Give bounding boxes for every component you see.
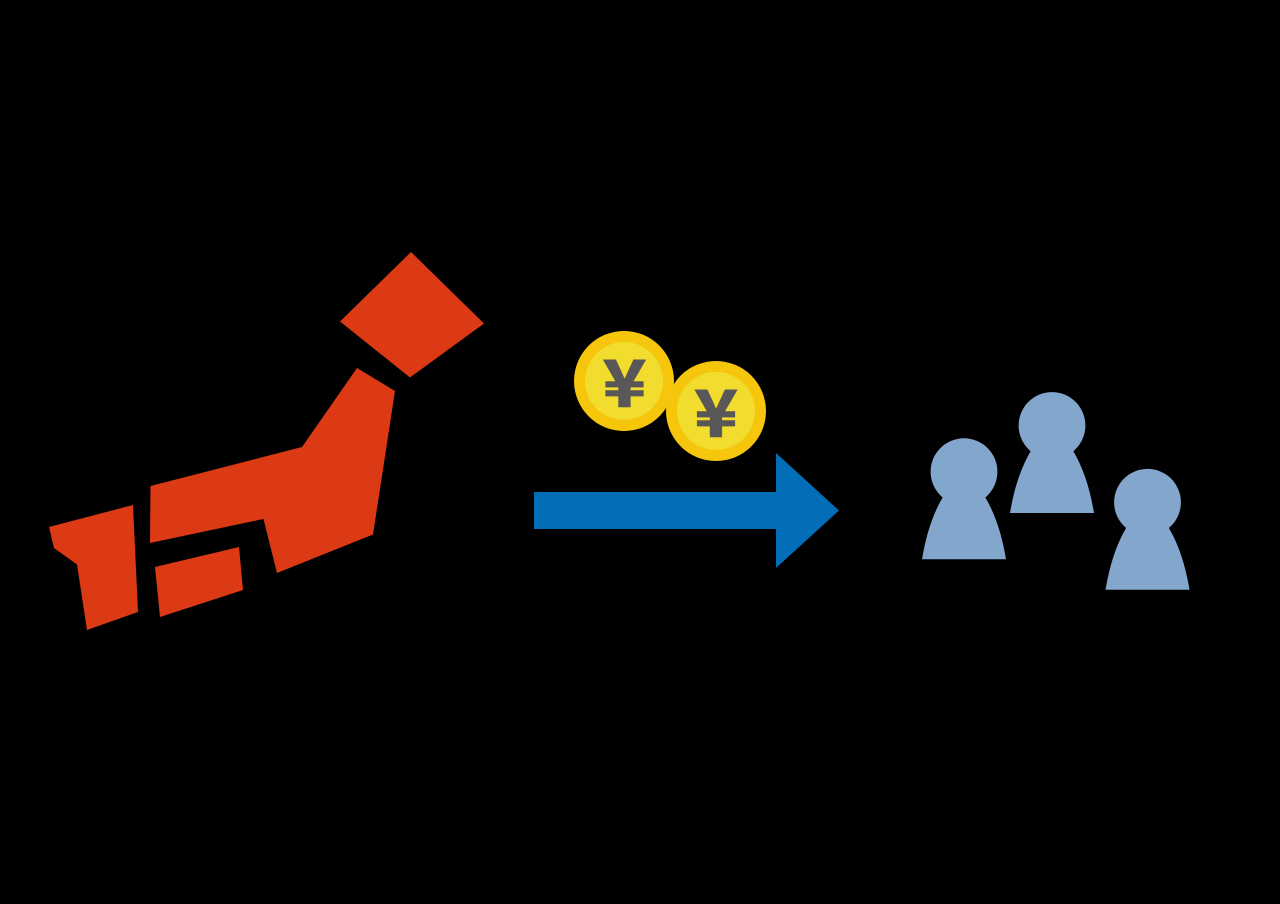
person: right	[1106, 469, 1190, 590]
yen coins	[574, 331, 766, 461]
map of Japan	[49, 252, 484, 630]
person: middle	[1010, 392, 1094, 513]
Kyushu	[49, 505, 138, 630]
coin: right: ¥	[694, 362, 738, 455]
Shikoku	[155, 547, 243, 617]
people group	[922, 392, 1190, 590]
Hokkaido	[340, 252, 484, 378]
coin: left	[574, 331, 674, 431]
coin: right	[666, 361, 766, 461]
coin: left: ¥	[603, 332, 646, 425]
Honshu	[150, 368, 395, 573]
arrow	[534, 453, 839, 568]
person: left	[922, 438, 1006, 559]
